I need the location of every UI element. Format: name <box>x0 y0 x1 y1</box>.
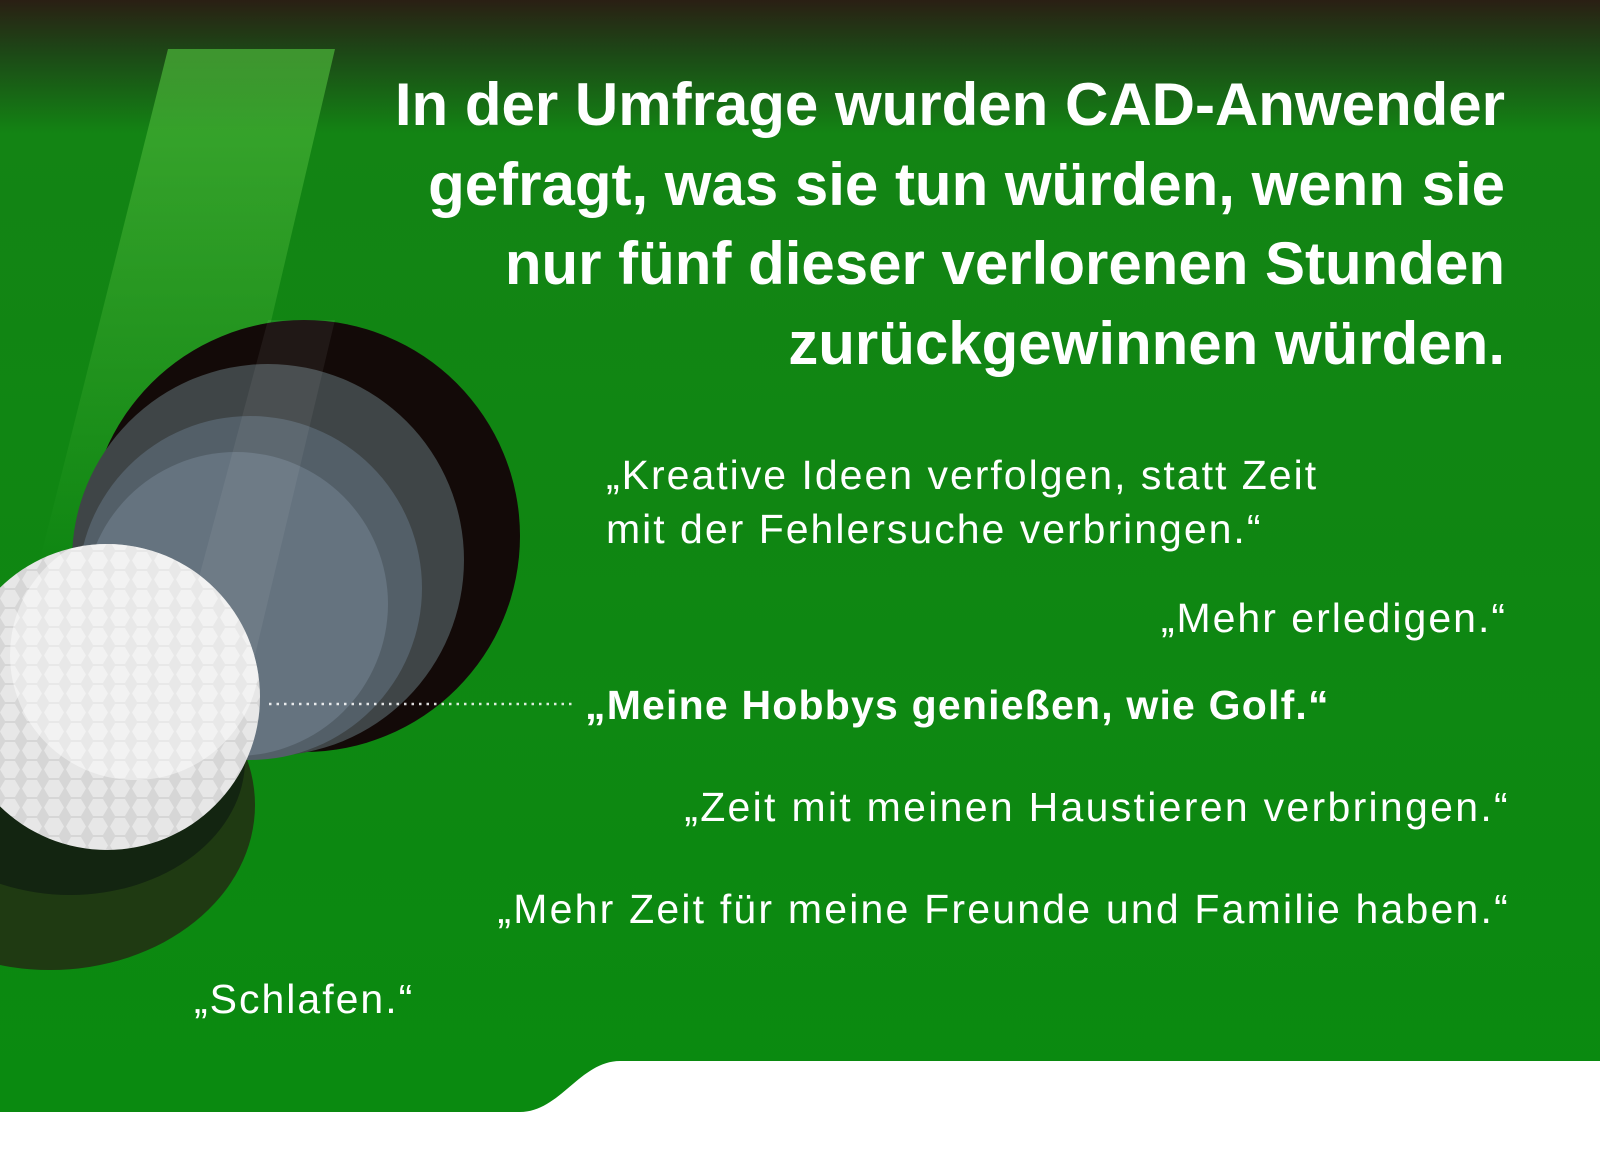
quote: pets: „Zeit mit meinen Haustieren verbringen.“ <box>684 784 1510 830</box>
hole <box>72 320 520 760</box>
quote: hobbies golf: „Meine Hobbys genießen, wie Golf.“ <box>585 682 1330 728</box>
quote: sleep: „Schlafen.“ <box>194 976 414 1022</box>
ball shadow <box>0 625 255 970</box>
light stripe <box>40 49 335 560</box>
title: gefragt, was sie tun würden, wenn sie <box>428 150 1505 218</box>
quote: more done: „Mehr erledigen.“ <box>1161 595 1507 641</box>
quote: creative ideas: „Kreative Ideen verfolgen, statt Zeit <box>606 452 1318 498</box>
quote: creative ideas <box>606 452 1318 552</box>
quote: creative ideas: mit der Fehlersuche verbringen.“ <box>606 506 1262 552</box>
golf ball <box>0 530 260 850</box>
quote: friends family: „Mehr Zeit für meine Freunde und Familie haben.“ <box>497 886 1510 932</box>
title <box>395 71 1505 377</box>
title: zurückgewinnen würden. <box>788 310 1505 376</box>
title: nur fünf dieser verlorenen Stunden <box>505 230 1505 297</box>
title: In der Umfrage wurden CAD-Anwender <box>395 71 1505 138</box>
dotted connector <box>269 703 572 705</box>
